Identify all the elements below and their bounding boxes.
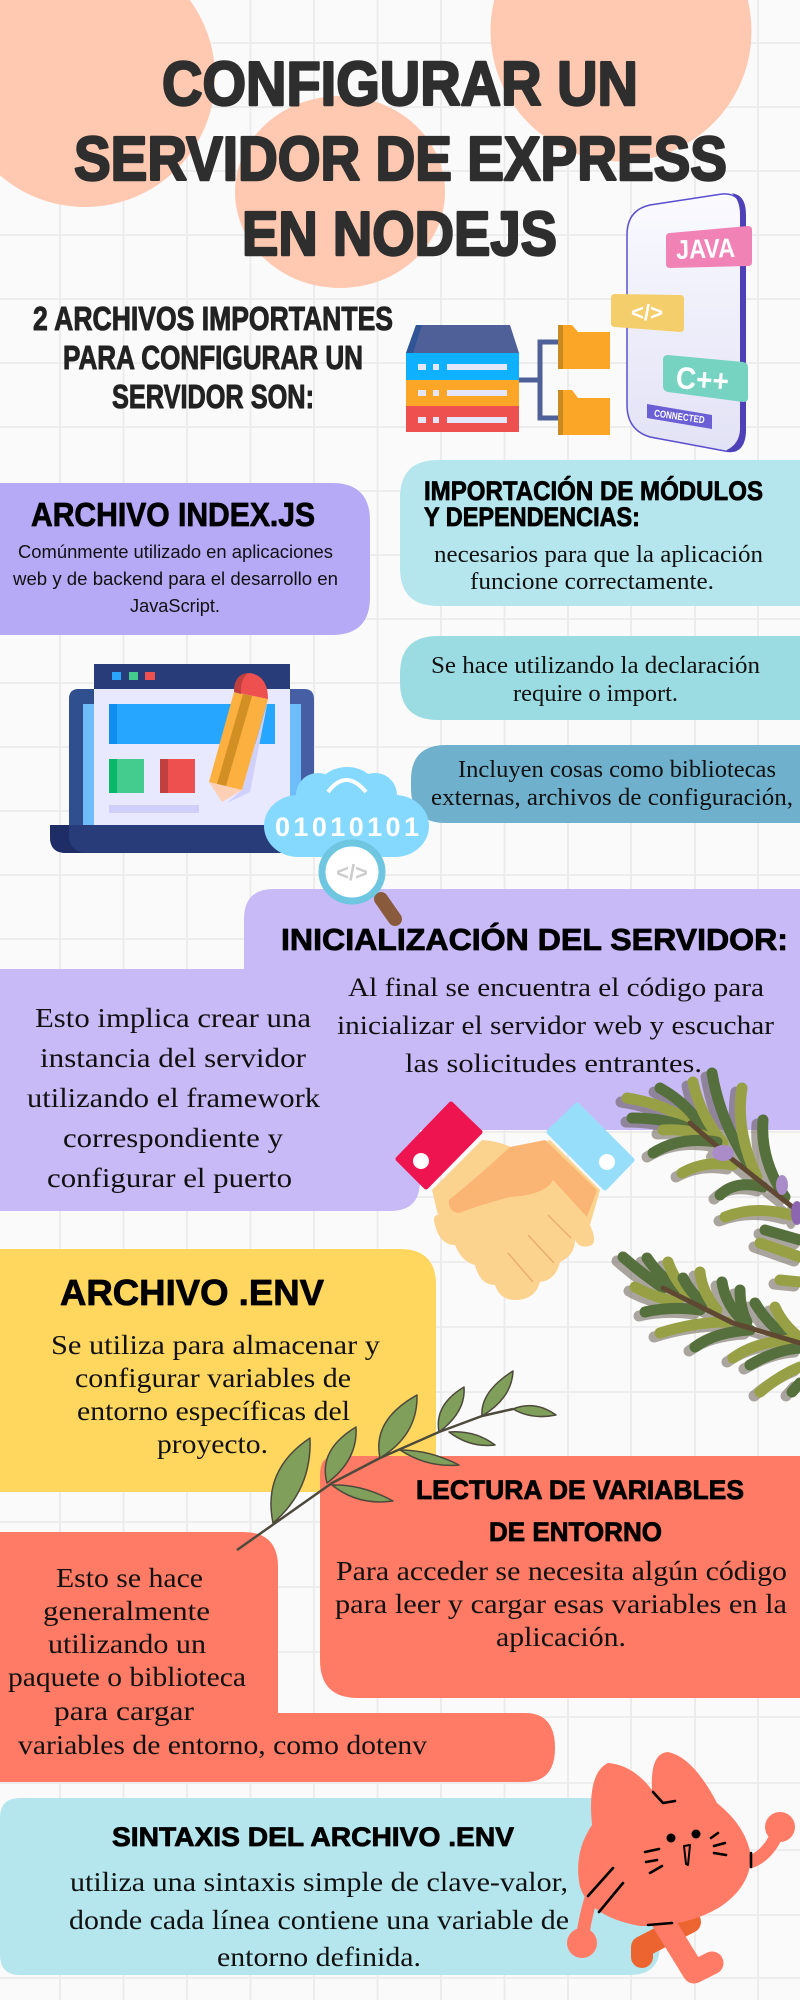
text: clave-valor — [69, 1867, 569, 1972]
icon: binary cloud — [264, 767, 429, 857]
icon: binary cloud: 01010101 — [275, 812, 419, 842]
text: index.js description — [12, 542, 338, 616]
heading: sintaxis: SINTAXIS DEL ARCHIVO .ENV — [112, 1822, 514, 1852]
text: al final: inicializar el servidor web y escuchar — [337, 1011, 774, 1040]
icon: magnifier — [322, 843, 395, 919]
icon: phone with language tags: CONNECTED — [653, 408, 705, 426]
text: index.js description: JavaScript. — [130, 596, 220, 616]
subtitle: SERVIDOR SON: — [112, 378, 314, 415]
icon: phone with language tags: </> — [631, 300, 663, 325]
title: SERVIDOR DE EXPRESS — [74, 125, 727, 194]
text: se utiliza: Se utiliza para almacenar y — [51, 1330, 381, 1360]
text: index.js description: web y de backend para el desarrollo en — [12, 569, 338, 589]
text: esto implica: instancia del servidor — [40, 1043, 306, 1073]
text: esto implica: correspondiente y — [63, 1123, 284, 1153]
text: se utiliza: entorno específicas del — [77, 1396, 350, 1426]
heading: importación: IMPORTACIÓN DE MÓDULOS — [424, 475, 763, 506]
icon: phone with language tags: JAVA — [676, 233, 736, 265]
text: necesarios — [434, 542, 763, 595]
text: esto implica: Esto implica crear una — [35, 1003, 311, 1033]
subtitle: PARA CONFIGURAR UN — [63, 339, 363, 376]
icon: phone with language tags — [611, 194, 752, 452]
panel: esto se hace: paquete o biblioteca — [8, 1662, 246, 1692]
icon: pencil — [209, 673, 268, 803]
illustration: olive branch — [237, 1371, 556, 1550]
panel: esto se hace — [0, 1532, 555, 1782]
text: para acceder — [335, 1556, 787, 1652]
heading: archivo index.js: ARCHIVO INDEX.JS — [31, 496, 315, 533]
heading: archivo .env: ARCHIVO .ENV — [60, 1272, 324, 1313]
panel: declaración: Se hace utilizando la declaración — [431, 653, 760, 679]
decorative peach circles — [0, 0, 752, 288]
panel: inicialización del servidor — [0, 889, 800, 1211]
panel: esto se hace: Esto se hace — [56, 1563, 203, 1593]
text: se utiliza — [51, 1330, 381, 1459]
text: esto implica: configurar el puerto — [47, 1163, 292, 1193]
title: CONFIGURAR UN — [162, 50, 638, 119]
illustration: rosemary branch upper — [627, 1073, 800, 1282]
panel: esto se hace: utilizando un — [48, 1629, 207, 1659]
icon: magnifier: </> — [336, 860, 368, 885]
panel: esto se hace: generalmente — [43, 1596, 210, 1626]
icon: handshake — [398, 1104, 632, 1300]
text: necesarios: necesarios para que la aplicación — [434, 542, 763, 568]
text: clave-valor: utiliza una sintaxis simple de clave-valor, — [70, 1867, 568, 1897]
heading: importación — [424, 475, 763, 532]
panel: bibliotecas: externas, archivos de configuración, — [431, 785, 793, 811]
icon: laptop with pencil — [50, 664, 314, 853]
heading: lectura: LECTURA DE VARIABLES — [416, 1475, 744, 1505]
panel: declaración: require o import. — [513, 681, 678, 707]
panel: sintaxis del archivo .env — [0, 1798, 660, 1975]
text: necesarios: funcione correctamente. — [470, 569, 714, 595]
text: se utiliza: proyecto. — [157, 1429, 268, 1459]
text: al final: Al final se encuentra el código para — [348, 973, 765, 1002]
text: para acceder: aplicación. — [496, 1622, 626, 1652]
illustration: rosemary branch lower — [623, 1257, 800, 1392]
panel: importación de módulos — [400, 460, 800, 606]
subtitle: 2 ARCHIVOS IMPORTANTES — [33, 300, 393, 337]
text: al final — [337, 973, 774, 1078]
text: esto implica — [27, 1003, 321, 1193]
text: esto implica: utilizando el framework — [27, 1083, 321, 1113]
panel: bibliotecas: Incluyen cosas como bibliotecas — [458, 757, 776, 783]
heading: importación: Y DEPENDENCIAS: — [424, 502, 640, 532]
icon: phone with language tags: C++ — [675, 360, 730, 399]
panel: archivo .env — [0, 1249, 436, 1492]
heading: lectura — [416, 1475, 744, 1547]
panel: esto se hace: para cargar — [54, 1696, 194, 1726]
text: para acceder: para leer y cargar esas variables en la — [335, 1589, 787, 1619]
heading: lectura: DE ENTORNO — [489, 1517, 662, 1547]
icon: cat mascot — [567, 1752, 795, 1972]
panel: declaración — [400, 636, 800, 720]
text: se utiliza: configurar variables de — [75, 1363, 351, 1393]
title — [74, 50, 727, 269]
subtitle — [33, 300, 393, 415]
icon: server with folders — [406, 325, 610, 435]
text: al final: las solicitudes entrantes. — [405, 1049, 702, 1078]
panel: esto se hace: variables de entorno, como dotenv — [18, 1730, 428, 1760]
text: para acceder: Para acceder se necesita algún código — [336, 1556, 787, 1586]
panel: lectura de variables — [320, 1456, 800, 1698]
panel: archivo index.js — [0, 483, 370, 635]
text: index.js description: Comúnmente utilizado en aplicaciones — [18, 542, 333, 562]
panel: bibliotecas — [411, 745, 800, 823]
text: clave-valor: donde cada línea contiene una variable de — [69, 1905, 569, 1935]
heading: inicialización: INICIALIZACIÓN DEL SERVIDOR: — [281, 921, 788, 957]
text: clave-valor: entorno definida. — [217, 1942, 421, 1972]
title: EN NODEJS — [242, 200, 557, 269]
